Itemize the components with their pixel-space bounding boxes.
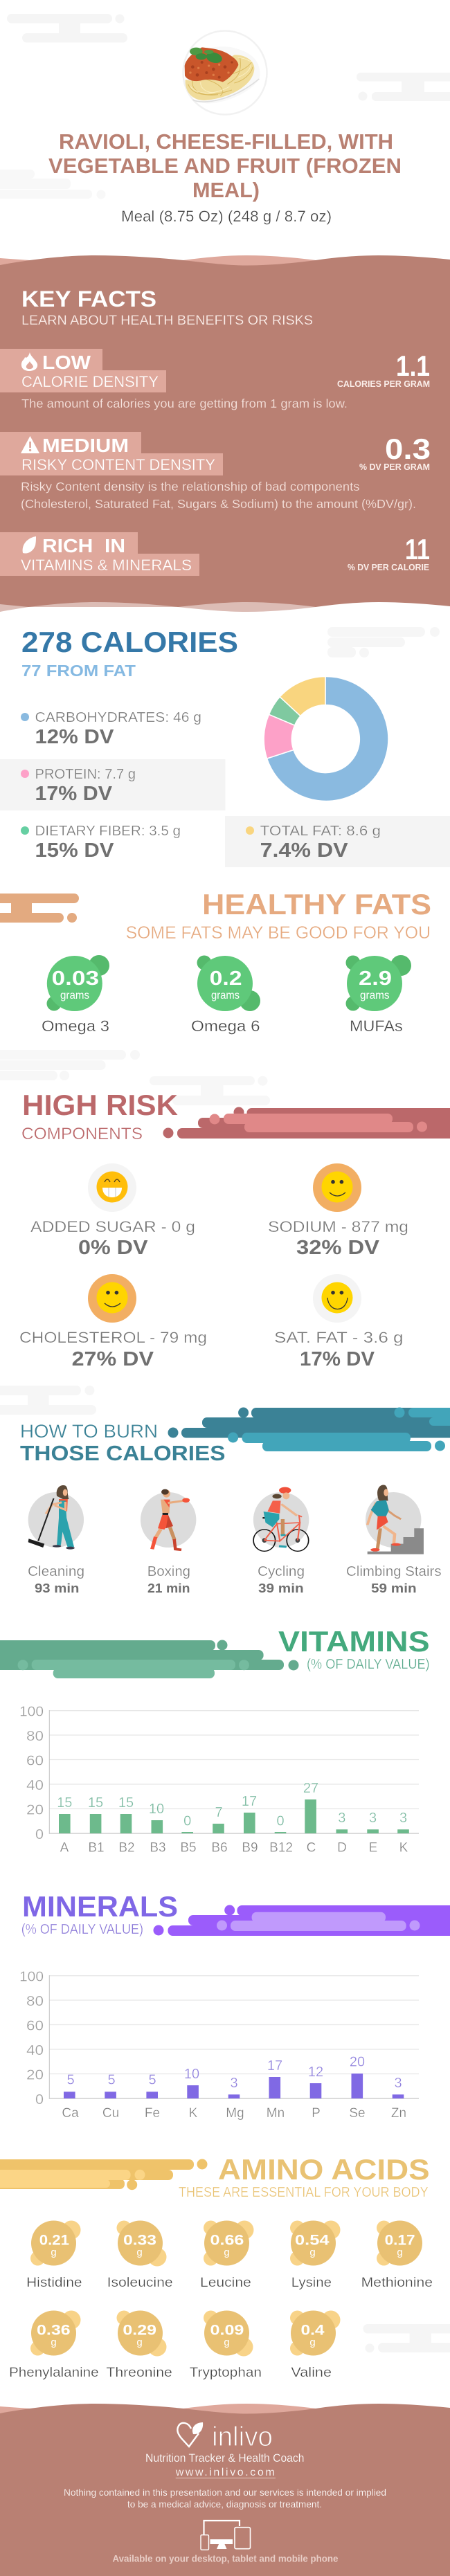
item: saturated fat: SAT. FAT - 3.6 g — [274, 1329, 403, 1346]
legend: protein: PROTEIN: 7.7 g — [35, 767, 136, 782]
icon: person climbing stairs — [366, 1485, 424, 1554]
availability note: Available on your desktop, tablet and mobile phone — [112, 2554, 339, 2564]
heading line 1: HOW TO BURN — [20, 1421, 158, 1442]
subheading: LEARN ABOUT HEALTH BENEFITS OR RISKS — [21, 313, 313, 328]
panel: healthy fats — [0, 888, 431, 1035]
amino: leucine: 0.66 — [210, 2232, 244, 2249]
icon: cyclist — [253, 1487, 309, 1551]
bar chart: vitamins: 15 — [88, 1795, 103, 1811]
item: sodium — [268, 1163, 408, 1259]
amino: lysine — [290, 2220, 341, 2290]
bar chart: minerals: 80 — [26, 1993, 44, 2009]
amino: lysine: 0.54 — [295, 2232, 330, 2249]
bar chart: minerals: Zn — [391, 2106, 406, 2121]
bar chart: vitamins: B5 — [180, 1841, 197, 1856]
bar chart: vitamins: B1 — [88, 1841, 105, 1856]
food image: spaghetti plate — [183, 30, 267, 115]
amino: tryptophan — [190, 2310, 262, 2380]
amino: phenylalanine — [9, 2310, 99, 2380]
bar chart: minerals: 5 — [107, 2073, 116, 2088]
heading line 2: THOSE CALORIES — [20, 1441, 226, 1465]
activity: cycling: Cycling — [258, 1563, 305, 1579]
bar chart: minerals: 3 — [230, 2076, 238, 2091]
bar chart: minerals: 3 — [394, 2076, 402, 2091]
bar chart: vitamins: 60 — [26, 1752, 44, 1769]
amino: phenylalanine: 0.36 — [37, 2322, 71, 2339]
bar chart: minerals — [19, 1968, 419, 2121]
bar chart: minerals: 10 — [184, 2067, 199, 2082]
disclaimer: to be a medical advice, diagnosis or treatment. — [127, 2498, 322, 2510]
stat: omega 3: grams — [60, 990, 89, 1001]
legend: dietary fiber — [21, 824, 181, 862]
bar chart: vitamins: B6 — [211, 1841, 228, 1856]
amino: methionine: g — [397, 2247, 403, 2258]
stat: omega 3 — [42, 955, 109, 1035]
amino: isoleucine: 0.33 — [123, 2232, 156, 2249]
fact: medium risky content density — [0, 432, 431, 511]
legend: dietary fiber: DIETARY FIBER: 3.5 g — [35, 824, 181, 839]
bar chart: vitamins: 0 — [276, 1814, 285, 1829]
amino: threonine: Threonine — [106, 2365, 172, 2380]
stat: mufas: 2.9 — [359, 968, 392, 990]
bar chart: minerals: 0 — [35, 2092, 44, 2107]
decorative bars — [168, 1408, 450, 1451]
bar chart: minerals: Se — [349, 2106, 366, 2121]
logo: wordmark: inlivo — [212, 2422, 273, 2452]
bar chart: vitamins: E — [369, 1841, 377, 1856]
wave background — [0, 255, 450, 612]
item: saturated fat — [274, 1274, 403, 1370]
amino: isoleucine: g — [136, 2247, 143, 2258]
fact: low calorie density: LOW — [42, 352, 91, 373]
logo: heart and leaf — [177, 2422, 203, 2447]
legend: carbohydrates — [21, 710, 201, 748]
decorative bars — [154, 1905, 450, 1936]
bar chart: vitamins: A — [60, 1841, 69, 1856]
fact: rich in vitamins and minerals: RICH IN — [42, 535, 125, 556]
activity: boxing: Boxing — [147, 1563, 190, 1579]
stat: omega 6 — [191, 955, 260, 1035]
bar chart: vitamins: 100 — [19, 1704, 44, 1719]
fact: low calorie density: CALORIE DENSITY — [21, 373, 159, 390]
bar chart: minerals: Mn — [267, 2106, 285, 2121]
panel: high risk components — [0, 1050, 450, 1370]
amino: tryptophan: Tryptophan — [190, 2365, 262, 2380]
amino: lysine: g — [309, 2247, 316, 2258]
fact: medium risky content density: 0.3 — [385, 433, 431, 465]
subheading: THESE ARE ESSENTIAL FOR YOUR BODY — [179, 2185, 429, 2200]
stat: mufas: MUFAs — [350, 1017, 403, 1035]
item: cholesterol: CHOLESTEROL - 79 mg — [19, 1329, 207, 1346]
activity: cleaning — [28, 1485, 84, 1595]
bar chart: vitamins — [19, 1704, 419, 1856]
panel: calories — [0, 626, 450, 867]
fact: rich in vitamins and minerals — [0, 532, 430, 576]
bar chart: vitamins: 15 — [118, 1795, 134, 1811]
wave background — [0, 2404, 450, 2576]
amino: valine: g — [309, 2337, 316, 2348]
amino: methionine — [361, 2220, 433, 2290]
item: saturated fat: 17% DV — [300, 1348, 375, 1370]
background cloud — [0, 1386, 96, 1415]
activity: cycling: 39 min — [258, 1581, 304, 1595]
amino: phenylalanine: g — [51, 2337, 57, 2348]
background cloud — [327, 627, 440, 657]
legend: carbohydrates: 12% DV — [35, 726, 114, 748]
bar chart: minerals: 20 — [350, 2055, 365, 2070]
stat: omega 3: Omega 3 — [42, 1017, 109, 1035]
stat: omega 6: 0.2 — [210, 968, 242, 990]
background cloud — [363, 2324, 450, 2352]
bar chart: vitamins: 27 — [303, 1781, 318, 1796]
fact: low calorie density: The amount of calories you are getting from 1 gram is low. — [21, 397, 348, 410]
fact: medium risky content density: % DV PER GRAM — [359, 462, 430, 472]
amino: tryptophan: g — [224, 2337, 230, 2348]
subheading: (% OF DAILY VALUE) — [21, 1922, 143, 1937]
amino: valine: Valine — [291, 2365, 332, 2380]
fact: medium risky content density: (Cholesterol, Saturated Fat, Sugars & Sodium) to the amount (%DV/gr). — [21, 497, 416, 511]
bar chart: minerals: 20 — [26, 2067, 44, 2083]
bar chart: vitamins: 3 — [338, 1811, 345, 1826]
subheading: COMPONENTS — [21, 1125, 143, 1143]
bar chart: minerals: Mg — [226, 2106, 244, 2121]
disclaimer — [64, 2487, 386, 2510]
activity: cleaning: Cleaning — [28, 1563, 84, 1579]
stat: omega 6: grams — [211, 990, 240, 1001]
header panel — [0, 14, 450, 225]
legend: total fat: TOTAL FAT: 8.6 g — [260, 824, 381, 839]
activity: cleaning: 93 min — [35, 1581, 79, 1595]
item: added sugar: 0% DV — [78, 1237, 148, 1259]
activity: cycling — [253, 1487, 309, 1595]
bar chart: minerals: P — [312, 2106, 321, 2121]
icon: wide smiling face — [321, 1282, 353, 1314]
amino: threonine: g — [136, 2337, 143, 2348]
bar chart: vitamins: 40 — [26, 1777, 44, 1793]
icon: person sweeping — [28, 1485, 84, 1550]
stat: mufas: grams — [360, 990, 390, 1001]
bar chart: minerals: 17 — [267, 2058, 282, 2074]
activity: boxing — [141, 1489, 196, 1595]
fact: rich in vitamins and minerals: 11 — [405, 533, 430, 565]
donut chart — [264, 676, 388, 801]
amino: leucine: g — [224, 2247, 230, 2258]
panel: key facts — [0, 255, 450, 612]
legend: protein: 17% DV — [35, 783, 113, 805]
activity: climbing stairs: Climbing Stairs — [346, 1563, 442, 1579]
bar chart: vitamins: B12 — [269, 1841, 293, 1856]
amino: leucine: Leucine — [200, 2275, 251, 2290]
website: www.inlivo.com — [175, 2467, 275, 2478]
amino: valine: 0.4 — [300, 2322, 325, 2339]
heading: AMINO ACIDS — [218, 2153, 430, 2186]
title: MEAL) — [192, 179, 260, 202]
amino: lysine: Lysine — [291, 2275, 332, 2290]
heading: HIGH RISK — [22, 1089, 178, 1121]
amino: valine — [290, 2310, 341, 2380]
legend: protein — [21, 767, 136, 805]
item: cholesterol — [19, 1274, 207, 1370]
bar chart: minerals: K — [189, 2106, 198, 2121]
fact: medium risky content density: RISKY CONTENT DENSITY — [21, 456, 215, 473]
icon: leaf — [23, 536, 36, 554]
subheading: 77 FROM FAT — [21, 662, 136, 680]
decorative bars — [0, 894, 79, 923]
background cloud lower left — [0, 170, 105, 199]
icon: desktop, tablet and phone — [201, 2521, 251, 2550]
bar chart: minerals: 12 — [308, 2065, 323, 2080]
background cloud left — [7, 14, 127, 43]
bar chart: vitamins: 10 — [149, 1802, 164, 1817]
panel: vitamins — [0, 1625, 430, 1856]
activity: climbing stairs — [346, 1485, 442, 1595]
subheading: (% OF DAILY VALUE) — [307, 1657, 430, 1672]
amino: methionine: Methionine — [361, 2275, 433, 2290]
heading: VITAMINS — [278, 1625, 430, 1658]
fact: low calorie density: CALORIES PER GRAM — [337, 379, 430, 389]
activity: boxing: 21 min — [147, 1581, 190, 1595]
bar chart: minerals: 5 — [66, 2073, 75, 2088]
heading: 278 CALORIES — [21, 626, 238, 658]
fact: low calorie density — [0, 349, 430, 410]
bar chart: minerals: 40 — [26, 2042, 44, 2058]
bar chart: vitamins: B2 — [118, 1841, 135, 1856]
item: cholesterol: 27% DV — [72, 1348, 154, 1370]
serving size: Meal (8.75 Oz) (248 g / 8.7 oz) — [121, 208, 332, 225]
bar chart: vitamins: 20 — [26, 1802, 44, 1817]
bar chart: vitamins: K — [399, 1841, 408, 1856]
item: added sugar — [30, 1163, 195, 1259]
fact: medium risky content density: Risky Content density is the relationship of bad components — [21, 480, 360, 493]
stat: omega 6: Omega 6 — [191, 1017, 260, 1035]
bar chart: vitamins: 7 — [215, 1805, 223, 1820]
bar chart: minerals: Ca — [62, 2106, 79, 2121]
background clouds — [0, 1050, 270, 1105]
heading: KEY FACTS — [21, 287, 156, 311]
legend rows background — [0, 759, 450, 867]
amino: methionine: 0.17 — [385, 2232, 415, 2249]
stat: mufas — [346, 955, 411, 1035]
stat: omega 3: 0.03 — [52, 968, 99, 990]
heading: HEALTHY FATS — [202, 888, 431, 920]
legend: dietary fiber: 15% DV — [35, 840, 114, 862]
bar chart: vitamins: 3 — [399, 1811, 407, 1826]
icon: grinning face — [97, 1171, 127, 1203]
fact: rich in vitamins and minerals: % DV PER CALORIE — [348, 562, 429, 572]
activity: climbing stairs: 59 min — [371, 1581, 417, 1595]
subheading: SOME FATS MAY BE GOOD FOR YOU — [126, 923, 431, 943]
panel: footer — [0, 2404, 450, 2576]
fact: medium risky content density: MEDIUM — [42, 435, 129, 456]
icon: boxer — [141, 1489, 196, 1550]
bar chart: vitamins: B3 — [150, 1841, 166, 1856]
bar chart: vitamins: 15 — [57, 1795, 72, 1811]
fact: low calorie density: 1.1 — [396, 350, 430, 382]
background cloud right — [357, 73, 450, 101]
decorative bars — [0, 2159, 208, 2190]
bar chart: minerals: Fe — [145, 2106, 160, 2121]
icon: smiling face — [321, 1171, 353, 1203]
amino: histidine: g — [51, 2247, 57, 2258]
bar chart: vitamins: 0 — [35, 1826, 44, 1842]
title: VEGETABLE AND FRUIT (FROZEN — [48, 154, 402, 178]
bar chart: vitamins: 3 — [369, 1811, 377, 1826]
bar chart: vitamins: B9 — [242, 1841, 258, 1856]
decorative bars — [0, 1640, 299, 1678]
panel: amino acids — [0, 2153, 450, 2380]
bar chart: minerals: 60 — [26, 2018, 44, 2033]
icon: smiling face — [97, 1282, 127, 1314]
item: sodium: SODIUM - 877 mg — [268, 1218, 408, 1235]
legend: carbohydrates: CARBOHYDRATES: 46 g — [35, 710, 201, 725]
amino: threonine: 0.29 — [123, 2322, 156, 2339]
bar chart: minerals: 100 — [19, 1968, 44, 1985]
amino: threonine — [106, 2310, 172, 2380]
bar chart: minerals: 5 — [148, 2073, 156, 2088]
panel: how to burn those calories — [0, 1386, 450, 1595]
bar chart: vitamins: 80 — [26, 1728, 44, 1744]
amino: histidine: Histidine — [26, 2275, 82, 2290]
title — [48, 130, 402, 202]
item: added sugar: ADDED SUGAR - 0 g — [30, 1218, 195, 1235]
heading: MINERALS — [22, 1890, 178, 1923]
title: RAVIOLI, CHEESE-FILLED, WITH — [59, 130, 393, 154]
icon: warning triangle — [21, 436, 39, 453]
bar chart: vitamins: 17 — [242, 1794, 257, 1809]
legend: total fat — [246, 824, 381, 862]
disclaimer: Nothing contained in this presentation and our services is intended or implied — [64, 2487, 386, 2498]
fact: rich in vitamins and minerals: VITAMINS & MINERALS — [21, 556, 192, 574]
bar chart: vitamins: D — [337, 1841, 347, 1856]
panel: minerals — [19, 1890, 450, 2121]
legend: total fat: 7.4% DV — [260, 840, 348, 862]
bar chart: vitamins: C — [307, 1841, 316, 1856]
amino: isoleucine: Isoleucine — [107, 2275, 173, 2290]
amino: histidine — [26, 2220, 82, 2290]
bar chart: vitamins: 0 — [183, 1814, 191, 1829]
decorative bars — [163, 1107, 450, 1139]
item: sodium: 32% DV — [296, 1237, 380, 1259]
amino: histidine: 0.21 — [39, 2232, 69, 2249]
bar chart: minerals: Cu — [102, 2106, 119, 2121]
amino: leucine — [200, 2220, 253, 2290]
tagline: Nutrition Tracker & Health Coach — [145, 2452, 305, 2465]
icon: flame — [21, 352, 37, 371]
amino: tryptophan: 0.09 — [210, 2322, 244, 2339]
amino: phenylalanine: Phenylalanine — [9, 2365, 99, 2380]
amino: isoleucine — [107, 2220, 173, 2290]
